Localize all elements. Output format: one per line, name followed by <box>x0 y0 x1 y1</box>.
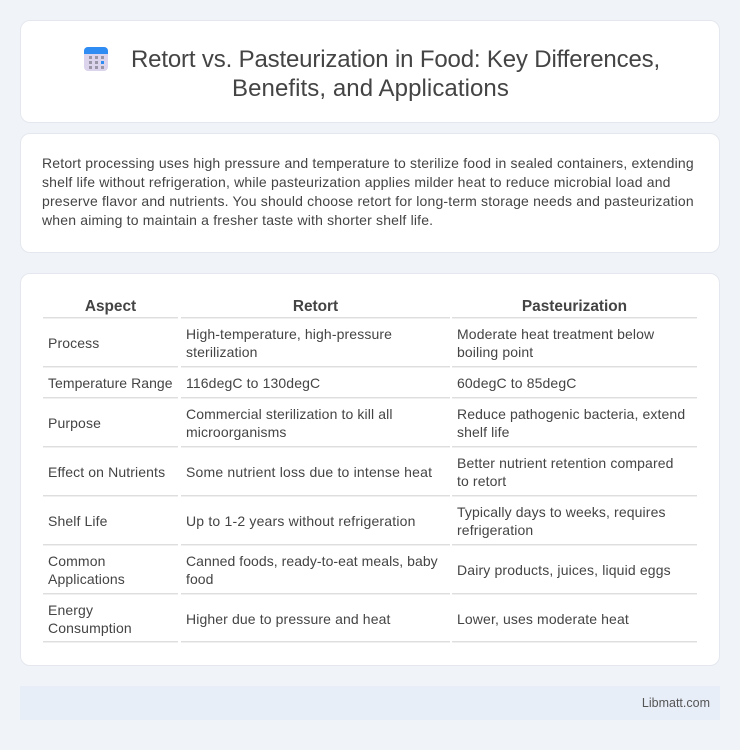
row: common applications: Applications <box>48 571 125 587</box>
row: energy consumption: Energy <box>48 602 93 618</box>
row: shelf life: Typically days to weeks, requires <box>457 504 666 520</box>
footer bar <box>20 686 720 720</box>
table header: Pasteurization <box>522 298 627 315</box>
row: temperature range: Temperature Range <box>48 375 173 391</box>
row: purpose <box>43 406 697 448</box>
comparison table <box>43 298 697 643</box>
row: energy consumption: Lower, uses moderate heat <box>457 611 629 627</box>
row: temperature range: 60degC to 85degC <box>457 375 576 391</box>
row: effect on nutrients: Better nutrient retention compared <box>457 455 674 471</box>
text block: introduction <box>42 155 694 228</box>
panel: comparison table card <box>20 273 720 666</box>
row: process: boiling point <box>457 344 533 360</box>
row: effect on nutrients: to retort <box>457 473 506 489</box>
icon: calendar <box>84 47 108 71</box>
row: process <box>43 326 697 368</box>
row: process: Moderate heat treatment below <box>457 326 654 342</box>
text block: introduction: when aiming to maintain a fresher taste with shorter shelf life. <box>42 212 433 228</box>
row: energy consumption <box>43 602 697 643</box>
row: purpose: shelf life <box>457 424 510 440</box>
row: purpose: Reduce pathogenic bacteria, extend <box>457 406 685 422</box>
row: purpose: Purpose <box>48 415 101 431</box>
row: purpose: microorganisms <box>186 424 286 440</box>
panel: introduction card <box>20 133 720 253</box>
row: energy consumption: Higher due to pressure and heat <box>186 611 391 627</box>
title: Benefits, and Applications <box>232 75 509 102</box>
row: temperature range: 116degC to 130degC <box>186 375 320 391</box>
row: temperature range <box>43 375 697 399</box>
row: effect on nutrients: Some nutrient loss due to intense heat <box>186 464 432 480</box>
row: effect on nutrients: Effect on Nutrients <box>48 464 165 480</box>
table header <box>43 298 697 319</box>
row: purpose: Commercial sterilization to kill all <box>186 406 393 422</box>
row: process: Process <box>48 335 99 351</box>
row: effect on nutrients <box>43 455 697 497</box>
row: process: sterilization <box>186 344 258 360</box>
row: shelf life: Shelf Life <box>48 513 108 529</box>
row: common applications: Canned foods, ready-to-eat meals, baby <box>186 553 438 569</box>
row: process: High-temperature, high-pressure <box>186 326 392 342</box>
panel: title card <box>20 20 720 123</box>
row: common applications <box>43 553 697 595</box>
row: common applications: Dairy products, juices, liquid eggs <box>457 562 671 578</box>
table header: Aspect <box>85 298 136 315</box>
row: common applications: food <box>186 571 213 587</box>
row: common applications: Common <box>48 553 106 569</box>
title <box>131 46 660 102</box>
footer text: Libmatt.com <box>642 696 710 710</box>
row: shelf life <box>43 504 697 546</box>
table header: Retort <box>293 298 338 315</box>
title: Retort vs. Pasteurization in Food: Key Differences, <box>131 46 660 73</box>
text block: introduction: Retort processing uses high pressure and temperature to sterilize food in sealed containers, extending <box>42 155 694 171</box>
row: shelf life: refrigeration <box>457 522 533 538</box>
text block: introduction: shelf life without refrigeration, while pasteurization applies milder heat to reduce microbial load and <box>42 174 671 190</box>
text block: introduction: preserve flavor and nutrients. You should choose retort for long-term storage needs and pasteurization <box>42 193 694 209</box>
row: energy consumption: Consumption <box>48 620 132 636</box>
row: shelf life: Up to 1-2 years without refrigeration <box>186 513 416 529</box>
